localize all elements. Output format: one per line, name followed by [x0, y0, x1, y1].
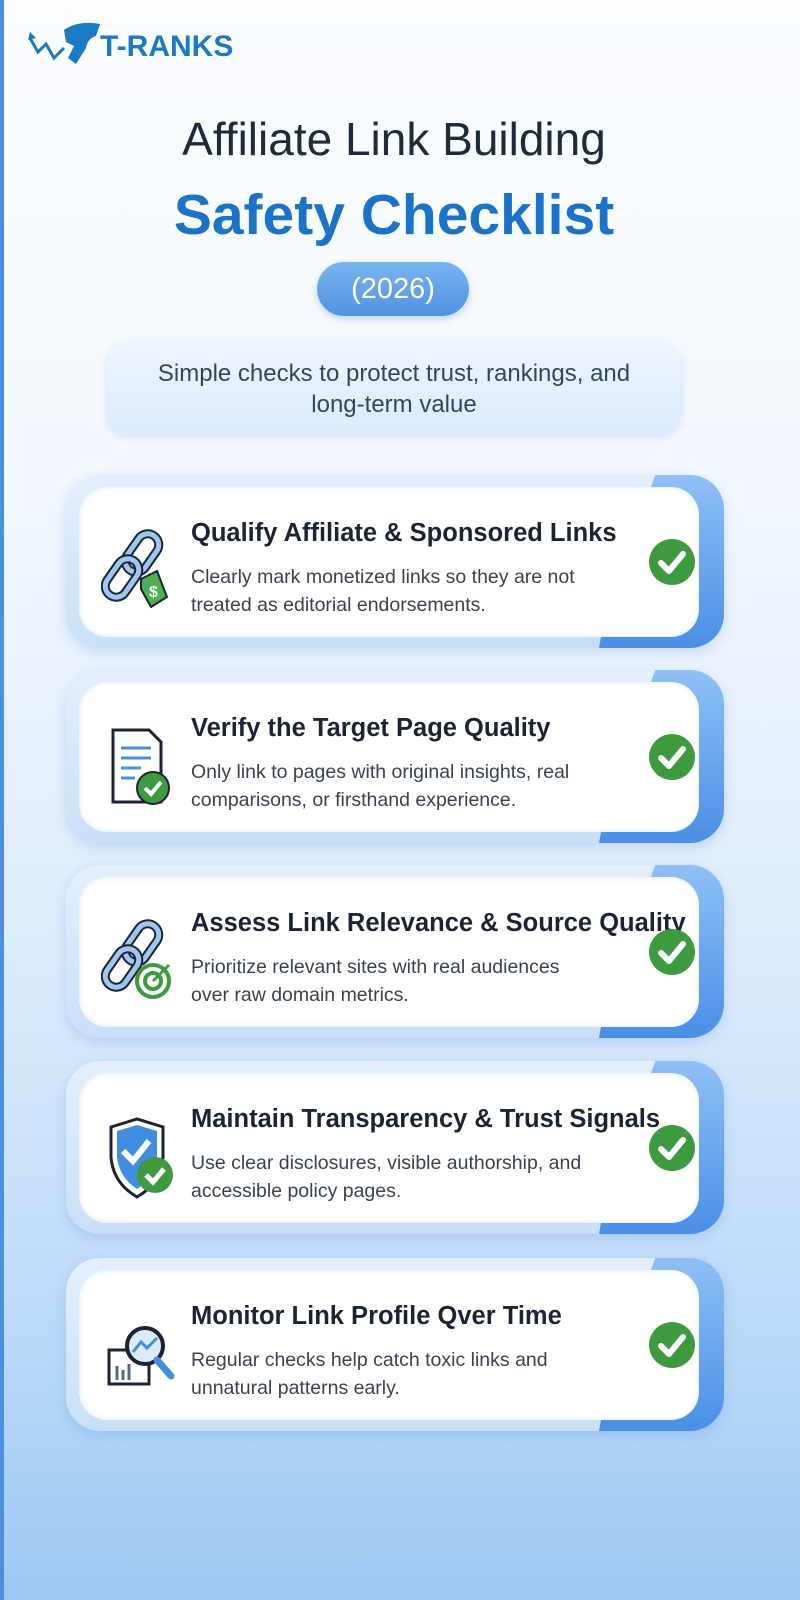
- icon: chain with tag: [101, 529, 168, 608]
- card 3: Prioritize relevant sites with real audiences: [191, 956, 560, 978]
- title highlight: Safety Checklist: [174, 183, 614, 247]
- icon: check: [649, 1125, 695, 1171]
- text: Maintain Transparency & Trust Signals: [191, 1105, 660, 1133]
- icon: chain with target: [101, 919, 171, 999]
- year pill: (2026): [351, 273, 435, 305]
- card 2: comparisons, or firsthand experience.: [191, 789, 516, 811]
- icon: magnifier chart: [108, 1326, 174, 1386]
- card 4: [66, 1061, 724, 1234]
- card 2: [66, 670, 724, 843]
- card 1: [66, 475, 724, 648]
- subtitle: long-term value: [311, 391, 477, 418]
- icon: document check: [112, 728, 170, 805]
- card 3: over raw domain metrics.: [191, 984, 409, 1006]
- icon: shield check: [110, 1117, 173, 1199]
- icon: check: [649, 539, 695, 585]
- subtitle: Simple checks to protect trust, rankings, and: [158, 360, 630, 387]
- card 4: accessible policy pages.: [191, 1180, 401, 1202]
- icon: check: [649, 929, 695, 975]
- subtitle: [107, 343, 681, 435]
- text: Monitor Link Profile Qver Time: [191, 1302, 562, 1330]
- icon: chain with tag: $: [149, 584, 158, 601]
- logo: T-RANKS: [100, 30, 233, 63]
- card 2: Only link to pages with original insights, real: [191, 761, 569, 783]
- icon: check: [649, 734, 695, 780]
- card 1: Clearly mark monetized links so they are not: [191, 566, 575, 588]
- title: Affiliate Link Building: [182, 113, 606, 165]
- card 3: [66, 865, 724, 1038]
- card 5: [66, 1258, 724, 1431]
- logo: [28, 22, 233, 64]
- text: Qualify Affiliate & Sponsored Links: [191, 519, 617, 547]
- card 4: Use clear disclosures, visible authorship, and: [191, 1152, 581, 1174]
- year pill: [317, 262, 469, 316]
- icon: check: [649, 1322, 695, 1368]
- text: Verify the Target Page Quality: [191, 714, 550, 742]
- card 5: Regular checks help catch toxic links and: [191, 1349, 548, 1371]
- text: Assess Link Relevance & Source Quality: [191, 909, 686, 937]
- card 5: unnatural patterns early.: [191, 1377, 400, 1399]
- card 1: treated as editorial endorsements.: [191, 594, 486, 616]
